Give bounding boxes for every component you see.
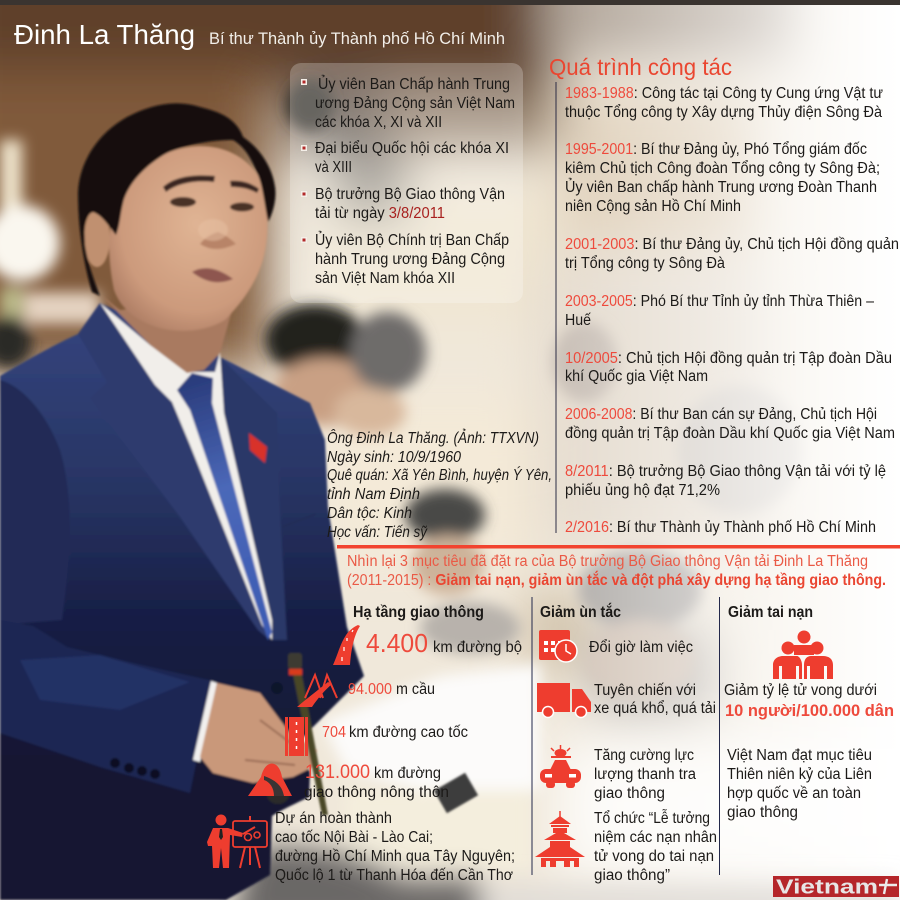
text: millennium goal: hợp quốc về an toàn (727, 785, 861, 802)
panel: positions held: Ủy viên Bộ Chính trị Ban Chấp (315, 231, 509, 249)
panel: accidents (724, 604, 894, 821)
sleeve (0, 620, 213, 793)
timeline: niên Cộng sản Hồ Chí Minh (565, 198, 741, 215)
stat: expressway: km đường cao tốc (349, 724, 468, 741)
text: millennium goal: Thiên niên kỷ của Liên (727, 766, 872, 783)
text: traffic inspection: lượng thanh tra (594, 766, 696, 783)
ear (84, 209, 110, 267)
text: oversized trucks: xe quá khổ, quá tải (594, 700, 716, 717)
icon: tunnel (248, 764, 292, 796)
text: millennium goal: giao thông (727, 804, 798, 821)
icon: curved road (333, 625, 360, 665)
shirt (100, 303, 272, 640)
text: oversized trucks (594, 682, 716, 717)
stat: bridges (348, 681, 435, 698)
lower grey blur (230, 847, 900, 900)
timeline: Ủy viên Ban chấp hành Trung ương Đoàn Thanh (565, 178, 877, 196)
panel: congestion: Đổi giờ làm việc (589, 639, 693, 656)
panel: infrastructure: Hạ tầng giao thông (353, 604, 484, 621)
timeline: 10/2005: Chủ tịch Hội đồng quản trị Tập đoàn Dầu (565, 350, 892, 367)
face (109, 146, 267, 331)
completed projects: Quốc lộ 1 từ Thanh Hóa đến Cần Thơ (275, 867, 513, 884)
title: Bí thư Thành ủy Thành phố Hồ Chí Minh (209, 29, 505, 48)
pocket (282, 514, 318, 548)
logo: Vietnam+ (773, 876, 899, 898)
completed projects (275, 810, 515, 884)
stat: rural roads (304, 762, 449, 801)
timeline: khí Quốc gia Việt Nam (565, 368, 708, 385)
text: remembrance day (594, 810, 717, 884)
icon: expressway (285, 717, 308, 756)
caption and biography: Học vấn: Tiến sỹ (327, 524, 428, 541)
timeline: 1983-1988: Công tác tại Công ty Cung ứng Vật tư (565, 85, 883, 102)
timeline: 2006-2008: Bí thư Ban cán sự Đảng, Chủ tịch Hội (565, 406, 877, 423)
timeline: 2/2016: Bí thư Thành ủy Thành phố Hồ Chí Minh (565, 519, 876, 536)
text: fatality rate (724, 682, 894, 720)
panel: positions held: Đại biểu Quốc hội các khóa XI (315, 140, 509, 157)
caption and biography: Ngày sinh: 10/9/1960 (327, 449, 461, 466)
panel: positions held: tải từ ngày 3/8/2011 (315, 205, 445, 222)
stat: bridges: m cầu (396, 681, 435, 698)
panel: positions held: Bộ trưởng Bộ Giao thông Vận (315, 186, 505, 203)
timeline: 1995-2001: Bí thư Đảng ủy, Phó Tổng giám đốc (565, 141, 867, 158)
stat: road km (366, 628, 522, 658)
stat: expressway: 704 (322, 724, 346, 741)
nose (200, 232, 236, 249)
microphone (291, 665, 328, 815)
completed projects: Dự án hoàn thành (275, 810, 392, 827)
stat: road km: km đường bộ (433, 639, 522, 656)
section intro: Nhìn lại 3 mục tiêu đã đặt ra của Bộ trưởng Bộ Giao thông Vận tải Đinh La Thăng (347, 553, 868, 570)
text: oversized trucks: Tuyên chiến với (594, 682, 696, 699)
section intro (347, 553, 886, 589)
panel: positions held: hành Trung ương Đảng Cộng (315, 251, 505, 268)
title: Đinh La Thăng (14, 19, 195, 50)
logo: Vietnam+: Vietnam (776, 876, 878, 898)
text: remembrance day: tử vong do tai nạn (594, 848, 714, 865)
bullet markers (301, 79, 307, 243)
stat: rural roads: km đường (374, 765, 441, 782)
completed projects: cao tốc Nội Bài - Lào Cai; (275, 829, 433, 846)
completed projects: đường Hồ Chí Minh qua Tây Nguyên; (275, 848, 515, 865)
icon: police car (540, 745, 581, 788)
icon: presenter (207, 814, 267, 868)
panel: congestion (535, 603, 717, 884)
title (14, 19, 505, 50)
timeline: phiếu ủng hộ đạt 71,2% (565, 482, 720, 499)
suit (0, 303, 364, 900)
paper blur (322, 664, 540, 870)
icon: group of people (773, 630, 833, 679)
caption and biography: Quê quán: Xã Yên Bình, huyện Ý Yên, (327, 467, 552, 484)
stat: road km: 4.400 (366, 628, 428, 658)
caption and biography: Ông Đinh La Thăng. (Ảnh: TTXVN) (327, 429, 539, 447)
text: millennium goal: Việt Nam đạt mục tiêu (727, 747, 872, 764)
text: remembrance day: Tổ chức “Lễ tưởng (594, 810, 710, 827)
timeline: thuộc Tổng công ty Xây dựng Thủy điện Sông Đà (565, 104, 882, 121)
stat: rural roads: 131.000 (305, 762, 370, 783)
text: remembrance day: niệm các nạn nhân (594, 829, 717, 846)
text: traffic inspection: giao thông (594, 785, 665, 802)
text: remembrance day: giao thông” (594, 867, 670, 884)
tie (177, 373, 272, 640)
text: fatality rate: 10 người/100.000 dân (725, 701, 894, 720)
column dividers (532, 597, 720, 875)
right lapel (220, 357, 287, 640)
left arm shading (0, 380, 70, 625)
timeline: 8/2011: Bộ trưởng Bộ Giao thông Vận tải với tỷ lệ (565, 463, 886, 480)
stat: bridges: 94.000 (348, 681, 392, 698)
timeline (556, 82, 899, 536)
timeline: kiêm Chủ tịch Công đoàn Tổng công ty Sông Đà; (565, 160, 880, 177)
neck (102, 296, 235, 373)
panel: accidents: Giảm tai nạn (728, 604, 813, 621)
text: traffic inspection: Tăng cường lực (594, 747, 694, 764)
caption and biography: Dân tộc: Kinh (327, 505, 412, 522)
text: millennium goal (727, 747, 872, 821)
lower right whitening (560, 740, 900, 875)
icon: pagoda (535, 811, 585, 867)
eyebrows (163, 175, 259, 193)
icon: bridge (297, 675, 337, 707)
heading: career timeline: Quá trình công tác (549, 54, 732, 80)
stat: rural roads: giao thông nông thôn (304, 784, 449, 801)
icon: truck (537, 683, 591, 718)
mouth (192, 268, 233, 282)
cuff (193, 681, 217, 762)
eyes (170, 197, 196, 207)
timeline: 2003-2005: Phó Bí thư Tỉnh ủy tỉnh Thừa Thiên – (565, 293, 874, 310)
left lapel (78, 303, 270, 640)
panel: positions held (290, 63, 523, 303)
text: fatality rate: Giảm tỷ lệ tử vong dưới (724, 682, 877, 699)
panel: positions held: ương Đảng Cộng sản Việt Nam (315, 95, 515, 112)
portrait: Đinh La Thăng (0, 103, 364, 900)
buttons (110, 758, 160, 779)
panel: positions held: các khóa X, XI và XII (315, 114, 442, 131)
text: traffic inspection (594, 747, 696, 802)
lapel pin (249, 433, 267, 463)
hand (200, 683, 317, 783)
icon: calendar and clock (539, 630, 577, 662)
panel: infrastructure (207, 604, 522, 884)
red divider (337, 545, 900, 548)
panel: positions held: Ủy viên Ban Chấp hành Trung (318, 75, 510, 93)
timeline: trị Tổng công ty Sông Đà (565, 255, 725, 272)
caption and biography (327, 429, 552, 541)
panel: congestion: Giảm ùn tắc (540, 603, 621, 621)
panel: positions held: và XIII (315, 159, 352, 176)
hair (78, 103, 275, 296)
panel: positions held: sản Việt Nam khóa XII (315, 270, 455, 287)
caption and biography: tỉnh Nam Định (327, 486, 420, 503)
timeline: Huế (565, 312, 591, 329)
